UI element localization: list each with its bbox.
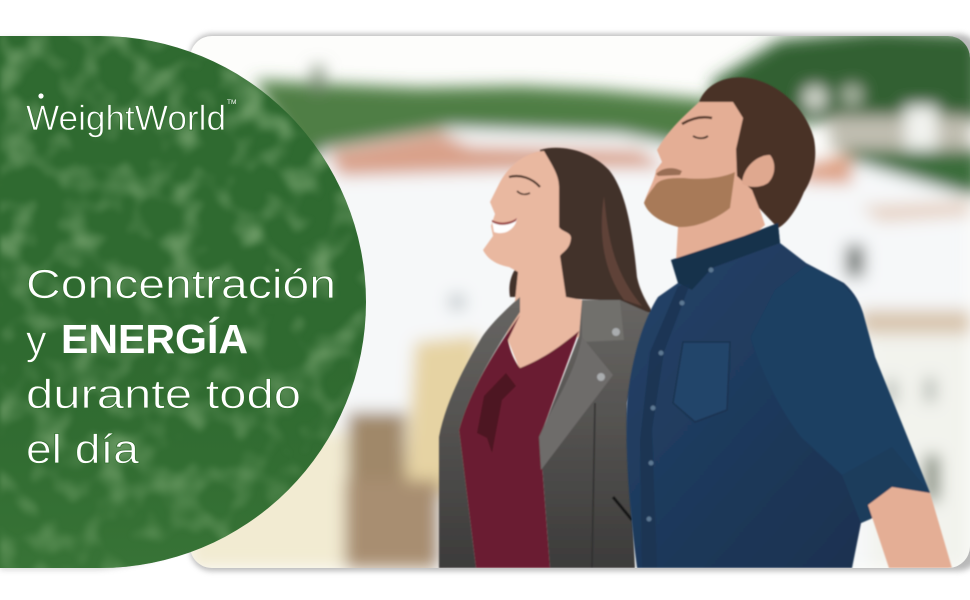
shirt bbox=[626, 223, 930, 568]
pocket bbox=[673, 342, 730, 422]
panel shadow bbox=[190, 34, 970, 571]
collar bbox=[671, 223, 780, 290]
hair bbox=[509, 148, 654, 314]
woman bbox=[439, 148, 654, 568]
top bbox=[459, 315, 579, 568]
man bbox=[626, 77, 952, 568]
headline bbox=[26, 261, 336, 472]
headline: ENERGÍA bbox=[61, 316, 248, 362]
jacket left bbox=[439, 297, 520, 568]
placket bbox=[640, 284, 690, 568]
ear bbox=[742, 155, 774, 187]
hair bbox=[699, 77, 815, 228]
headline: el día bbox=[26, 426, 139, 472]
cuff bbox=[842, 447, 930, 523]
headline: Concentración bbox=[26, 261, 336, 307]
photo panel: couple breathing outdoors bbox=[190, 30, 970, 568]
headline: y bbox=[26, 317, 47, 363]
panel: green shape bbox=[0, 30, 370, 575]
foliage texture bbox=[0, 30, 370, 575]
arm bbox=[868, 487, 952, 568]
logo: WeightWorld: TM bbox=[227, 99, 236, 106]
beard bbox=[644, 172, 735, 227]
neck and face bbox=[644, 100, 766, 260]
blurred town background bbox=[190, 30, 970, 568]
closed eye and brow bbox=[509, 176, 540, 187]
buttons bbox=[646, 268, 714, 522]
skin: face and neck bbox=[483, 151, 582, 370]
lace bbox=[477, 373, 516, 453]
headline: durante todo bbox=[26, 371, 301, 417]
jacket right bbox=[540, 300, 654, 568]
smile bbox=[492, 219, 517, 233]
logo: WeightWorld: WeightWorld bbox=[26, 99, 226, 138]
closed eye bbox=[693, 136, 708, 138]
sleeve bbox=[791, 312, 928, 490]
